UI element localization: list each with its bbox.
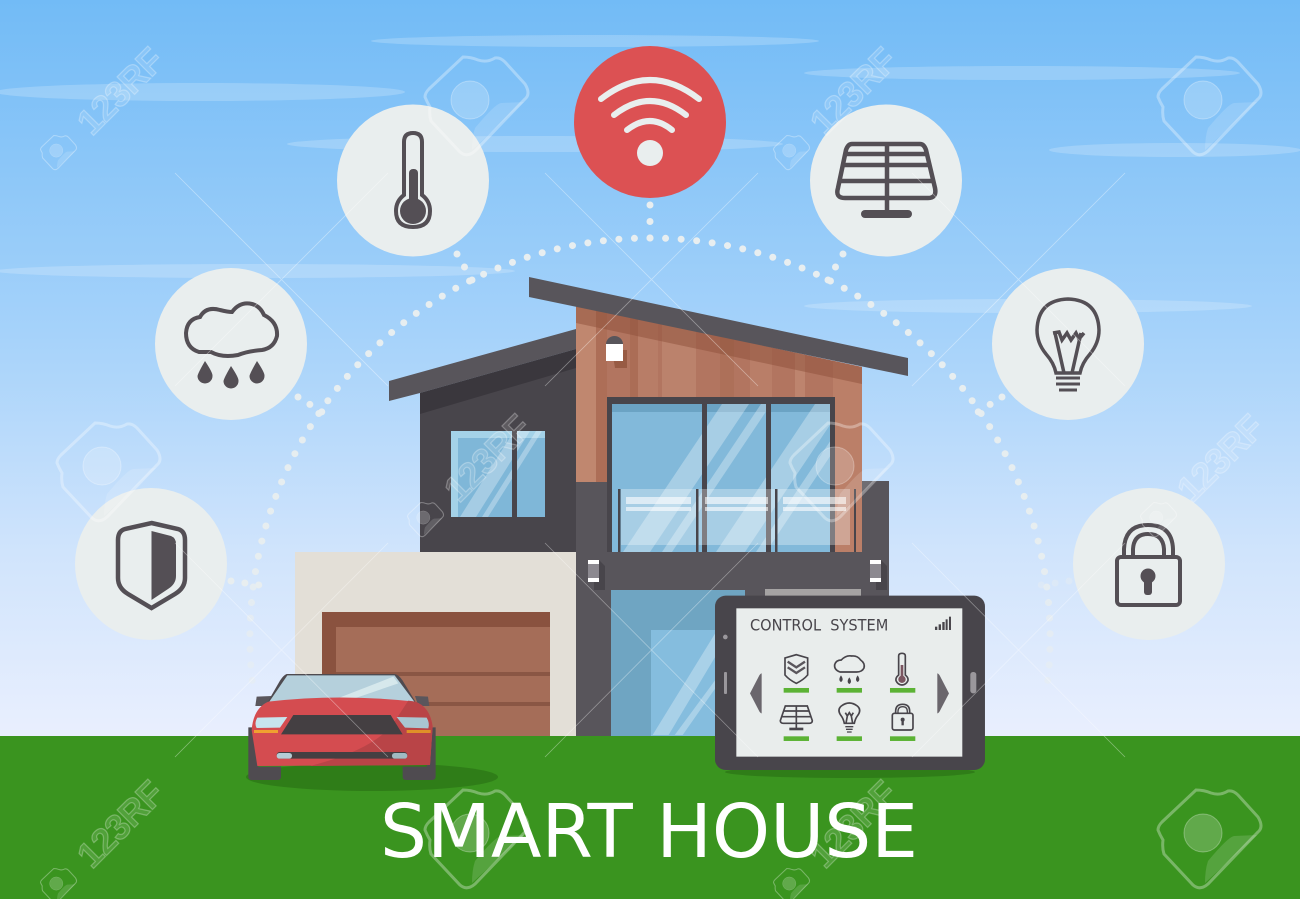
tablet thermometer icon: [896, 653, 908, 685]
watermark text: 123RF: [436, 406, 539, 510]
thermometer circle: [337, 104, 489, 256]
tablet solar icon: [780, 706, 812, 729]
car: [248, 674, 436, 780]
shield icon: [118, 523, 185, 608]
car body: [252, 697, 433, 766]
left roof shadow: [420, 349, 576, 414]
garage door: [322, 612, 550, 736]
ground: [0, 736, 1300, 899]
title: SMART HOUSE: [380, 789, 918, 875]
tablet shield icon: [785, 655, 808, 683]
watermark text: 123RF: [69, 772, 172, 876]
car lower vent: [277, 752, 407, 759]
tablet signal icon: [935, 617, 951, 630]
shield circle: [75, 488, 227, 640]
watermark diagonal lines: [175, 173, 1125, 757]
left window: [451, 431, 545, 517]
rain cloud icon: [186, 303, 277, 389]
rain cloud circle: [155, 268, 307, 420]
tablet camera and buttons: [723, 635, 976, 694]
watermark text: 123RF: [802, 39, 905, 143]
tablet screen: [736, 608, 962, 757]
beam light strip: [765, 589, 861, 597]
tablet: [715, 596, 985, 770]
car shadow: [246, 763, 498, 791]
left roof: [389, 329, 576, 401]
left dark wing wall: [420, 349, 580, 552]
car wheels: [248, 727, 436, 780]
car mirrors: [255, 696, 429, 706]
thermometer icon: [396, 133, 430, 227]
balcony dark columns and beam: [576, 481, 889, 736]
dotted connection arc: [231, 205, 1069, 695]
wifi circle: [574, 46, 726, 198]
ground floor glass: [611, 590, 745, 736]
wifi icon: [601, 80, 699, 166]
balcony glass railing: [618, 489, 856, 552]
tablet green status bars: [784, 688, 915, 741]
wall lamp: [606, 336, 627, 368]
watermark text: 123RF: [69, 39, 172, 143]
main roof: [529, 277, 908, 376]
watermark text: 123RF: [802, 772, 905, 876]
car grille: [281, 715, 403, 734]
tablet right arrow: [937, 673, 949, 713]
car windscreen: [267, 674, 416, 703]
lock circle: [1073, 488, 1225, 640]
balcony lights: [588, 560, 887, 590]
solar panel icon: [837, 144, 935, 214]
house: [295, 277, 908, 736]
light bulb circle: [992, 268, 1144, 420]
watermark text: 123RF: [1169, 406, 1272, 510]
watermark logos: [40, 136, 1177, 899]
tablet bulb icon: [839, 703, 860, 732]
tablet cloud icon: [835, 656, 864, 684]
light bulb icon: [1037, 299, 1099, 390]
tablet title: CONTROL SYSTEM: [750, 616, 888, 635]
car headlights: [254, 717, 431, 733]
tablet body: [715, 596, 985, 770]
tablet lock icon: [892, 704, 913, 730]
tablet left arrow: [750, 673, 762, 713]
clouds: [0, 35, 1300, 313]
tablet shadow: [725, 766, 975, 778]
lock icon: [1117, 525, 1180, 605]
wood wall: [576, 300, 862, 552]
garage wall: [295, 552, 576, 736]
balcony window: [607, 397, 835, 552]
solar panel circle: [810, 104, 962, 256]
